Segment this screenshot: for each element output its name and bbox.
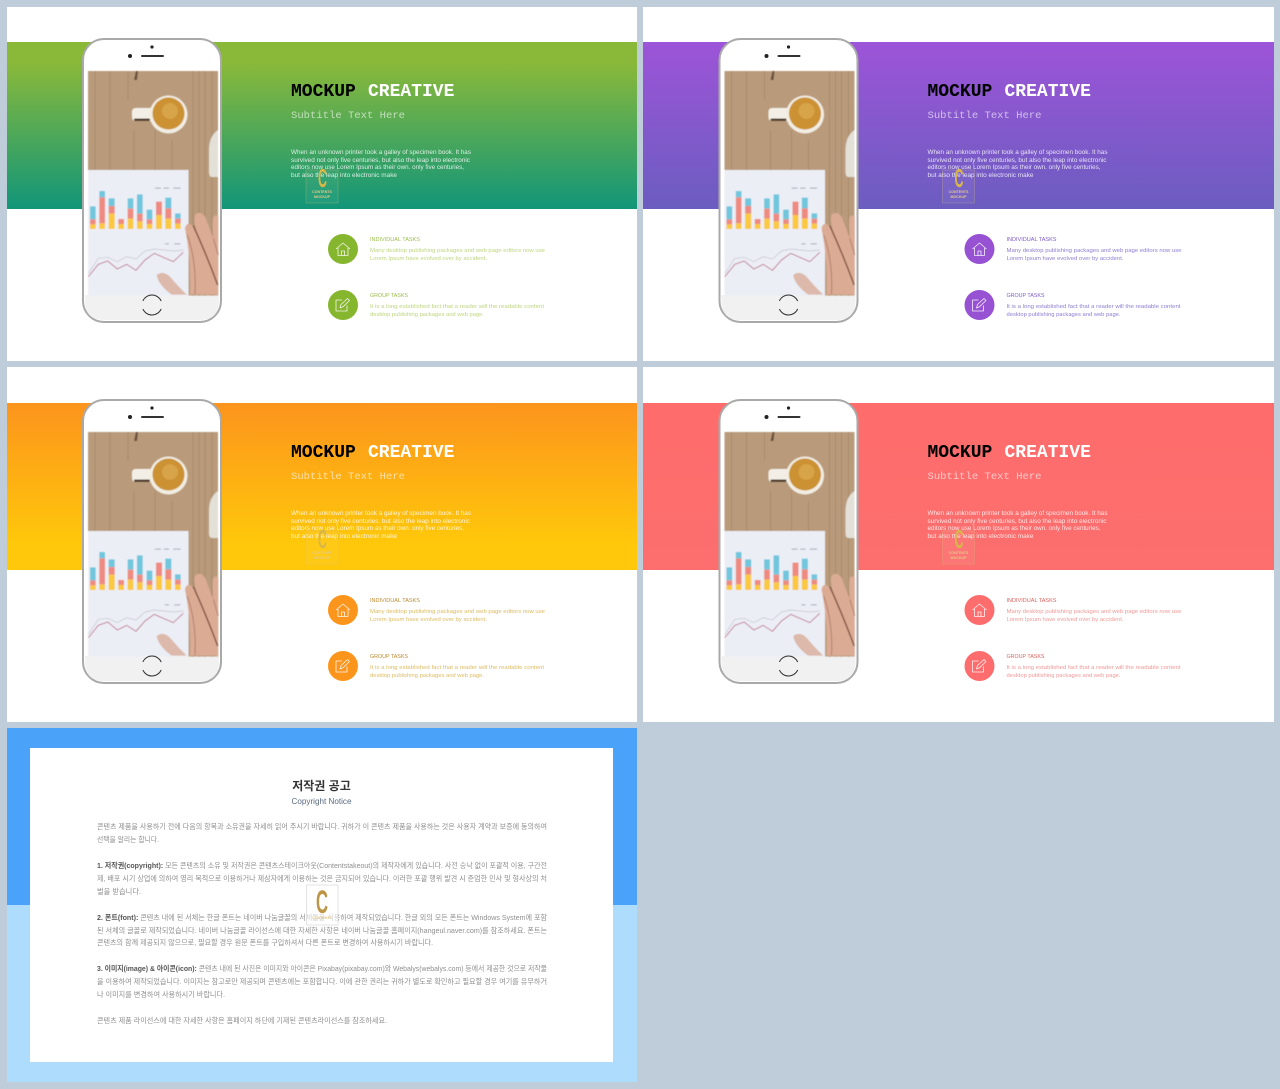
task: individual tasks: INDIVIDUAL TASKS — [370, 598, 420, 604]
task: group tasks — [370, 654, 544, 679]
heading: copyright notice: Copyright Notice — [292, 796, 352, 806]
paragraph: font: 2. 폰트(font): 콘텐츠 내에 된 서체는 한글 폰트는 네이버 나눔글꼴의 서체들을 사용하여 제작되었습니다. 한글 외의 모든 폰트는 Windows System에 포함 — [97, 913, 547, 922]
task: individual tasks — [1006, 237, 1182, 262]
purple gradient band — [643, 42, 1274, 209]
watermark logo — [306, 524, 338, 564]
phone mockup with desk photo — [720, 400, 858, 683]
phone mockup with desk photo — [83, 39, 221, 322]
phone mockup with desk photo — [720, 39, 858, 322]
task: group tasks: GROUP TASKS — [1006, 654, 1045, 660]
paragraph: font — [97, 913, 547, 947]
coral band — [643, 403, 1274, 570]
task: group tasks: GROUP TASKS — [370, 293, 408, 299]
body text: When an unknown printer took a galley of specimen book. It has — [291, 149, 471, 156]
task: individual tasks: Many desktop publishing packages and web page editors now use — [370, 248, 545, 254]
title: MOCKUP — [291, 443, 356, 463]
title: CREATIVE — [368, 82, 455, 102]
icon: edit — [328, 651, 358, 681]
task: group tasks: It is a long established fact that a reader will the readable content — [1006, 665, 1181, 671]
watermark logo — [306, 163, 338, 203]
body text: survived not only five centuries, but also the leap into electronic — [928, 518, 1106, 525]
task: individual tasks: INDIVIDUAL TASKS — [1006, 598, 1057, 604]
body text: survived not only five centuries, but also the leap into electronic — [291, 518, 470, 525]
task: individual tasks: Many desktop publishing packages and web page editors now use — [1006, 609, 1182, 615]
body text: When an unknown printer took a galley of specimen book. It has — [928, 149, 1108, 156]
task: individual tasks — [1006, 598, 1182, 623]
subtitle: Subtitle Text Here — [928, 471, 1042, 483]
body text: editors now use Lorem Ipsum as their own. only five centuries, — [291, 525, 464, 532]
paragraph: image and icon: 3. 이미지(image) & 아이콘(icon): 콘텐츠 내에 된 사진은 이미지와 아이콘은 Pixabay(pixabay.com)와 Webalys(webalys.com) 등에서 제공한 것으로 저작물 — [97, 964, 547, 973]
task: group tasks: desktop publishing packages and web page. — [1006, 312, 1121, 318]
task: individual tasks: Many desktop publishing packages and web page editors now use — [1006, 248, 1182, 254]
subtitle: Subtitle Text Here — [291, 471, 405, 483]
intro paragraph: 선택을 알리는 합니다. — [97, 835, 159, 844]
task: group tasks: It is a long established fact that a reader will the readable content — [1006, 304, 1181, 310]
body text: but also the leap into electronic make — [928, 533, 1034, 540]
body text — [291, 149, 471, 179]
body text: survived not only five centuries, but also the leap into electronic — [928, 157, 1106, 164]
title: CREATIVE — [1004, 443, 1091, 463]
orange gradient band — [7, 403, 637, 570]
watermark logo: CONTENTS — [312, 916, 332, 920]
task: individual tasks: INDIVIDUAL TASKS — [370, 237, 420, 243]
paragraph: image and icon: 나 이미지를 변경하여 사용하시기 바랍니다. — [97, 990, 225, 999]
body text: editors now use Lorem Ipsum as their own. only five centuries, — [291, 164, 464, 171]
panel: purple mockup slide — [643, 7, 1274, 361]
title: CREATIVE — [1004, 82, 1091, 102]
green gradient band — [7, 42, 637, 209]
paragraph: image and icon: 을 이용하여 제작되었습니다. 이미지는 참고로만 제공되며 콘텐츠에는 포함합니다. 이에 관한 권리는 귀하가 별도로 확인하고 필요할 경우 여기를 유무하거 — [97, 977, 547, 986]
paragraph: image and icon — [97, 964, 547, 999]
panel: green mockup slide — [7, 7, 637, 361]
task: individual tasks: Lorem Ipsum have evolved over by accident. — [1006, 256, 1124, 262]
body text: but also the leap into electronic make — [928, 172, 1034, 179]
closing line: 콘텐츠 제품 라이선스에 대한 자세한 사항은 홈페이지 하단에 기재된 콘텐츠라이선스를 참조하세요. — [97, 1016, 387, 1025]
paragraph: copyright: 제, 배포 시기 상업에 의하여 영리 목적으로 이용하거나 제삼자에게 이용하는 것은 금지되어 있습니다. 이러한 포괄 행위 발견 시 준엄한 민사 및 형사상의 처 — [97, 874, 547, 883]
icon: edit — [964, 651, 994, 681]
icon: edit — [328, 290, 358, 320]
task: group tasks — [370, 293, 544, 318]
icon: house — [964, 595, 994, 625]
subtitle: Subtitle Text Here — [291, 110, 405, 122]
body text: but also the leap into electronic make — [291, 172, 397, 179]
task: group tasks: desktop publishing packages and web page. — [370, 312, 484, 318]
task: individual tasks: Many desktop publishing packages and web page editors now use — [370, 609, 545, 615]
task: group tasks: It is a long established fact that a reader will the readable content — [370, 665, 544, 671]
paragraph: font: 콘텐츠의 함께 제공되지 않으므로, 필요할 경우 원문 폰트를 구입하셔서 다른 폰트로 변경하여 사용하시기 바랍니다. — [97, 938, 433, 947]
heading: copyright notice: 저작권 공고 — [292, 778, 351, 793]
body text — [291, 510, 471, 540]
title: CREATIVE — [368, 443, 455, 463]
body text: editors now use Lorem Ipsum as their own. only five centuries, — [928, 164, 1101, 171]
task: group tasks: desktop publishing packages and web page. — [370, 673, 484, 679]
watermark logo — [942, 524, 974, 564]
panel: copyright notice — [7, 728, 637, 1082]
subtitle: Subtitle Text Here — [928, 110, 1042, 122]
task: individual tasks: Lorem Ipsum have evolved over by accident. — [1006, 617, 1124, 623]
paragraph: copyright — [97, 861, 547, 896]
icon: house — [328, 234, 358, 264]
task: group tasks: GROUP TASKS — [1006, 293, 1045, 299]
watermark logo — [942, 163, 974, 203]
task: individual tasks: Lorem Ipsum have evolved over by accident. — [370, 256, 487, 262]
task: group tasks — [1006, 654, 1181, 679]
body text: survived not only five centuries, but also the leap into electronic — [291, 157, 470, 164]
paragraph: font: 된 서체의 글꼴로 제작되었습니다. 네이버 나눔글꼴 라이선스에 대한 자세한 사항은 네이버 나눔글꼴 홈페이지(hangeul.naver.com)를 참조하세요. 폰트는 — [97, 926, 547, 935]
task: group tasks: GROUP TASKS — [370, 654, 408, 660]
task: individual tasks: INDIVIDUAL TASKS — [1006, 237, 1057, 243]
icon: edit — [964, 290, 994, 320]
title: MOCKUP — [291, 82, 356, 102]
body text: When an unknown printer took a galley of specimen book. It has — [928, 510, 1108, 517]
task: group tasks — [1006, 293, 1181, 318]
body text: When an unknown printer took a galley of specimen book. It has — [291, 510, 471, 517]
paragraph: copyright: 벌을 받습니다. — [97, 887, 141, 896]
paragraph: copyright: 1. 저작권(copyright): 모든 콘텐츠의 소유 및 저작권은 콘텐츠스테이크아웃(Contentstakeout)의 제작자에게 있습니다. 사전 승낙 없이 포괄적 이용, 구간전 — [97, 861, 547, 870]
phone mockup with desk photo — [83, 400, 221, 683]
intro paragraph: 콘텐츠 제품을 사용하기 전에 다음의 항목과 소유권을 자세히 읽어 주시기 바랍니다. 귀하가 이 콘텐츠 제품을 사용하는 것은 사용자 계약과 보증에 동의하여 — [97, 822, 547, 831]
panel: coral mockup slide — [643, 367, 1274, 722]
icon: house — [964, 234, 994, 264]
heading: copyright notice — [292, 778, 352, 806]
task: individual tasks: Lorem Ipsum have evolved over by accident. — [370, 617, 487, 623]
intro paragraph — [97, 822, 547, 844]
body text: editors now use Lorem Ipsum as their own. only five centuries, — [928, 525, 1101, 532]
panel: orange mockup slide — [7, 367, 637, 722]
body text — [928, 510, 1108, 540]
body text — [928, 149, 1108, 179]
task: group tasks: desktop publishing packages and web page. — [1006, 673, 1121, 679]
task: individual tasks — [370, 598, 545, 623]
title: MOCKUP — [928, 443, 993, 463]
icon: house — [328, 595, 358, 625]
task: individual tasks — [370, 237, 545, 262]
watermark logo: C — [316, 884, 328, 920]
task: group tasks: It is a long established fact that a reader will the readable content — [370, 304, 544, 310]
title: MOCKUP — [928, 82, 993, 102]
watermark logo — [306, 884, 338, 925]
body text: but also the leap into electronic make — [291, 533, 397, 540]
